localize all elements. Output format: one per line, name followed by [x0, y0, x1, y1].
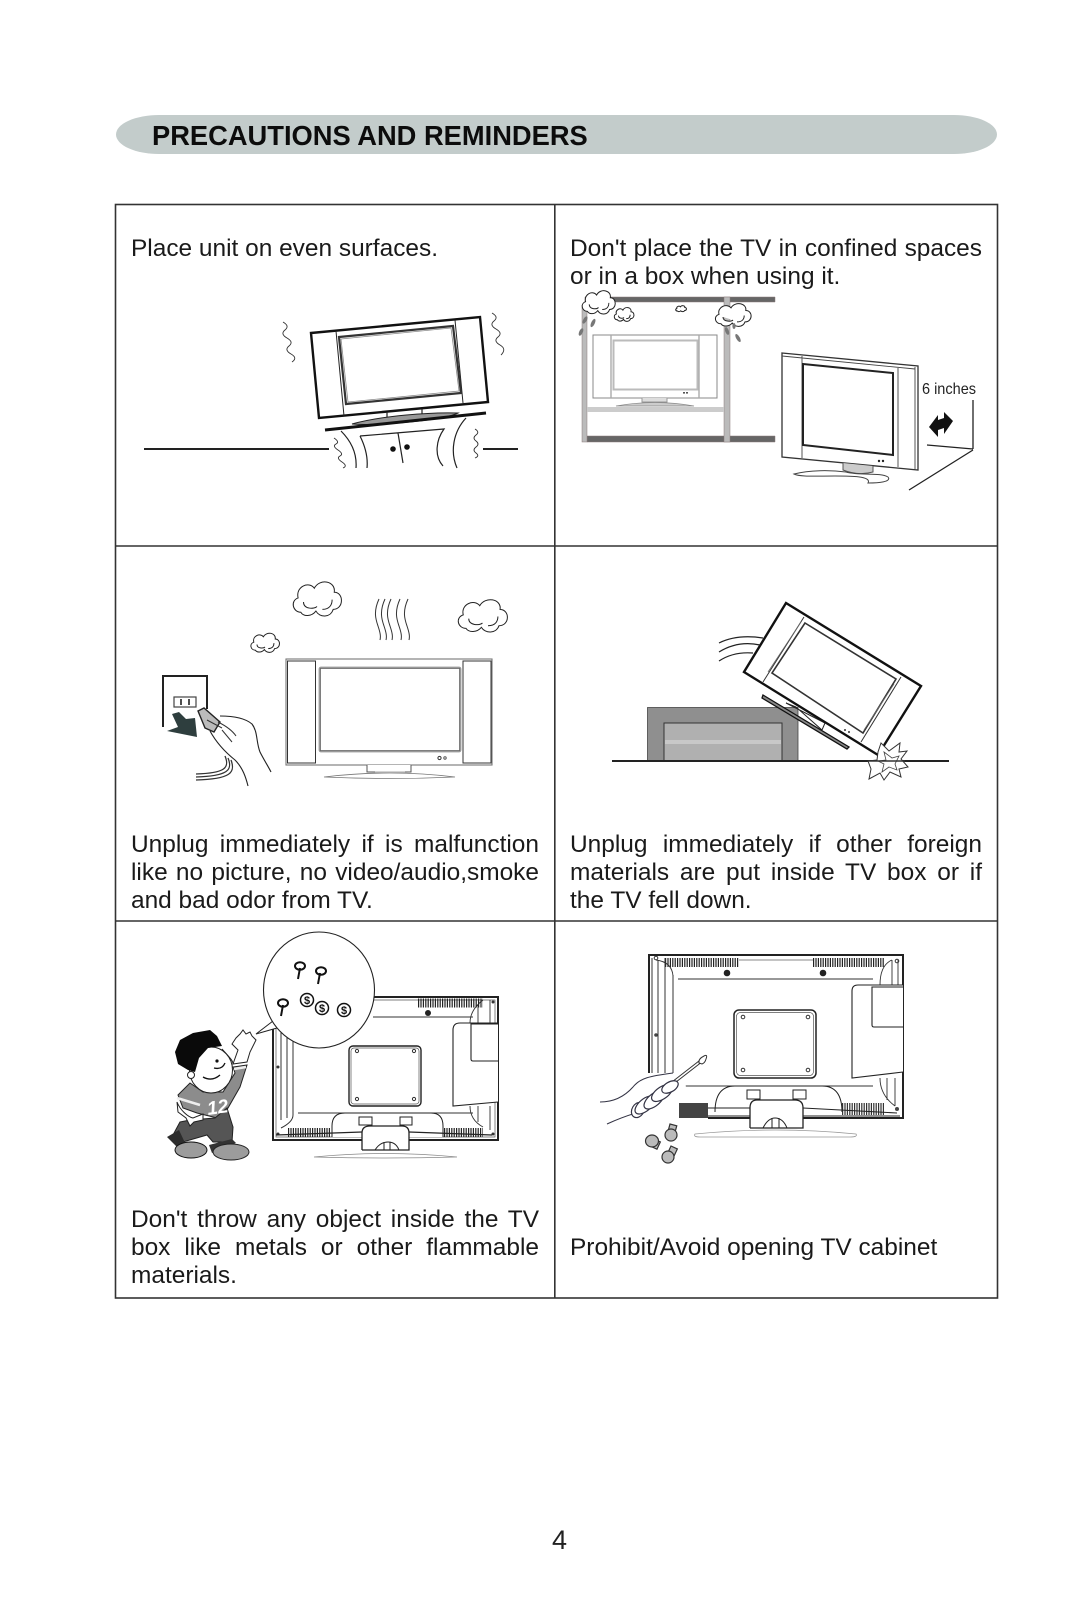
- illustration: thought bubble with nails and coins: $: [304, 995, 310, 1007]
- text: don't place TV in confined spaces: Don't place the TV in confined spaces: [570, 235, 982, 262]
- label: 6 inches: 6 inches: [922, 381, 976, 398]
- illustration: hand pulling plug from wall outlet: [163, 676, 271, 786]
- illustration: hand with screwdriver and screws: [600, 1055, 707, 1163]
- icon: impact burst: [868, 743, 908, 780]
- text: unplug immediately foreign materials: the TV fell down.: [570, 887, 752, 914]
- illustration: cheerful boy throwing objects: 12: [206, 1096, 230, 1120]
- text: unplug immediately malfunction: [131, 831, 539, 914]
- text: don't throw any object: materials.: [131, 1262, 237, 1289]
- text: unplug immediately malfunction: like no picture, no video/audio,smoke: [131, 859, 539, 886]
- panel: avoid opening cabinet: [570, 954, 938, 1261]
- text: don't throw any object: box like metals or other flammable: [131, 1234, 539, 1261]
- illustration: TV rear view: [649, 955, 903, 1137]
- text: unplug immediately malfunction: and bad odor from TV.: [131, 887, 373, 914]
- illustration: TV with 6 inches clearance: [782, 353, 976, 490]
- text: don't throw any object: Don't throw any object inside the TV: [131, 1206, 539, 1233]
- illustration: TV in cabinet with smoke: [578, 291, 775, 442]
- panel: unplug on malfunction: [131, 581, 539, 914]
- panel: confined spaces: [570, 235, 982, 490]
- page number: 4: [552, 1525, 567, 1555]
- illustration: thought bubble with nails and coins: [256, 932, 374, 1048]
- illustration: TV rear view: [273, 997, 498, 1158]
- illustration: cheerful boy throwing objects: [167, 1030, 256, 1160]
- illustration: smoking TV: [251, 582, 507, 778]
- illustration: TV falling off a stand: [612, 603, 949, 780]
- text: unplug immediately foreign materials: Unplug immediately if other foreign: [570, 831, 982, 858]
- panel: even surfaces: [131, 235, 518, 468]
- icon: double arrow: [929, 412, 953, 437]
- text: unplug immediately malfunction: Unplug immediately if is malfunction: [131, 831, 539, 858]
- text: unplug immediately foreign materials: [570, 831, 982, 914]
- panel: don't throw objects: [131, 932, 539, 1289]
- text: don't place TV in confined spaces: or in a box when using it.: [570, 263, 840, 290]
- text: unplug immediately foreign materials: materials are put inside TV box or if: [570, 859, 982, 886]
- text: don't throw any object: [131, 1206, 539, 1289]
- text: place unit: Place unit on even surfaces.: [131, 235, 438, 262]
- text: prohibit opening TV cabinet: Prohibit/Avoid opening TV cabinet: [570, 1234, 937, 1261]
- title banner: [116, 115, 997, 154]
- panel: TV fell down: [570, 601, 982, 914]
- illustration: thought bubble with nails and coins: $: [341, 1005, 347, 1017]
- text: don't place TV in confined spaces: [570, 235, 982, 290]
- heading: precautions and reminders: PRECAUTIONS AND REMINDERS: [152, 120, 588, 151]
- illustration: TV wobbling on uneven cabinet: [144, 313, 518, 468]
- illustration: thought bubble with nails and coins: $: [319, 1003, 325, 1015]
